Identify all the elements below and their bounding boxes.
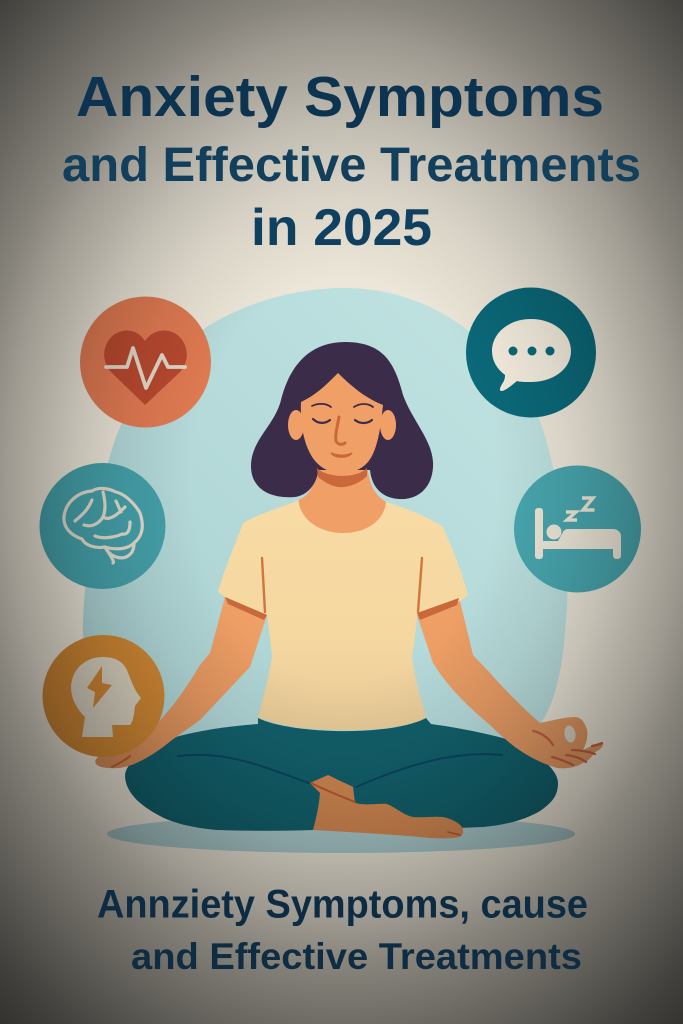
icon: bed with sleep (514, 466, 641, 592)
legs (125, 718, 558, 831)
icon: heart with pulse (80, 296, 211, 428)
hand creases (112, 731, 602, 767)
footer caption (97, 882, 588, 977)
title: in 2025 (251, 199, 432, 257)
ears (288, 410, 304, 440)
nose (336, 417, 345, 444)
face (301, 373, 383, 473)
footer caption: and Effective Treatments (131, 936, 582, 977)
finger ring gap (563, 725, 577, 743)
backdrop circle (83, 288, 568, 770)
sleeve seams (262, 558, 422, 612)
title: and Effective Treatments (62, 139, 641, 192)
footer caption: Annziety Symptoms, cause (97, 882, 588, 926)
shirt (218, 500, 468, 730)
meditating woman (95, 342, 603, 838)
eyes and brows (312, 404, 373, 423)
sleeve shadows (225, 597, 459, 620)
left arm (95, 597, 267, 768)
title (62, 65, 641, 257)
foot details (311, 783, 460, 835)
hair (251, 342, 433, 499)
sleep letters (566, 498, 594, 520)
neck shadow (317, 468, 367, 487)
title: Anxiety Symptoms (76, 65, 604, 129)
icon: speech bubble (466, 288, 596, 418)
neck (298, 460, 386, 533)
leg creases (178, 754, 502, 787)
mouth (331, 453, 352, 457)
icon: brain (40, 463, 166, 589)
icon: head with lightning bolt (42, 635, 164, 757)
crossed foot (310, 775, 463, 838)
right arm and hand (417, 601, 603, 768)
floor shadow (107, 815, 575, 853)
